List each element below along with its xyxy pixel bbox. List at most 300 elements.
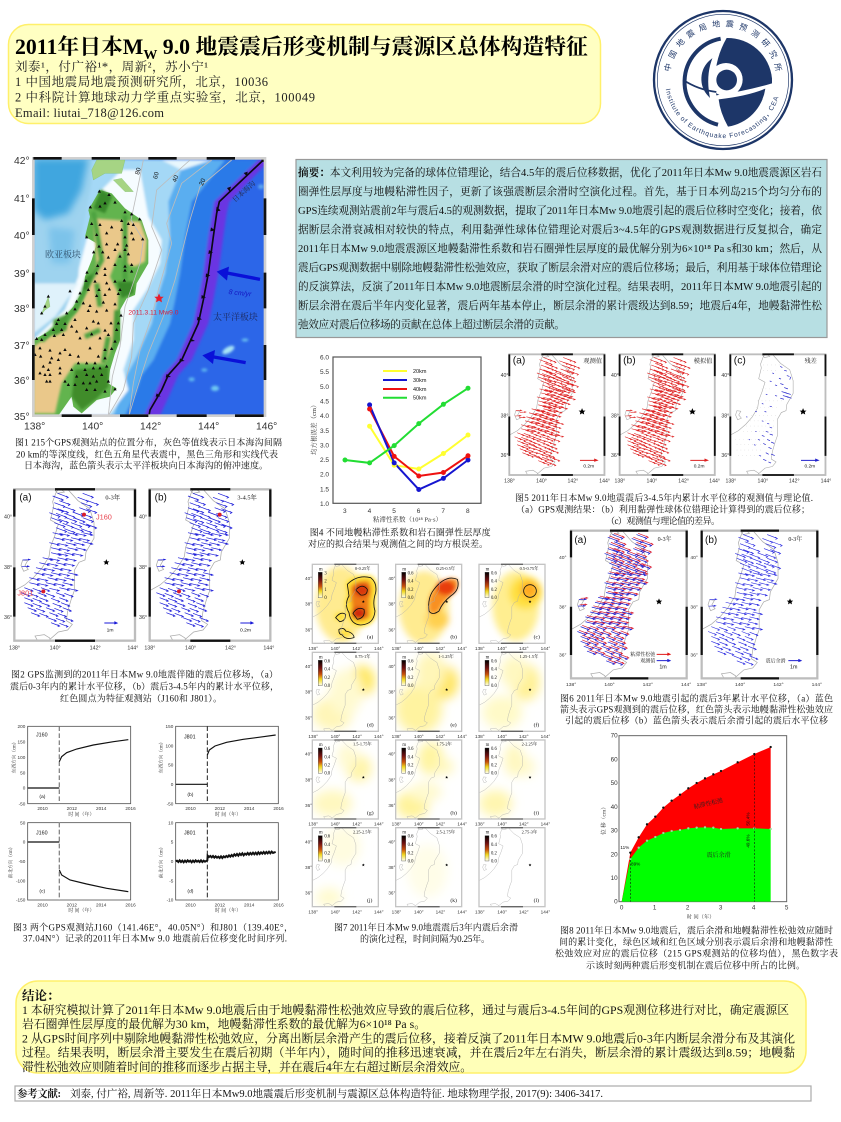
panel h [396,739,462,819]
authors and affiliations: 1 中国地震局地震预测研究所，北京，10036 [15,74,268,89]
axis labels: 40° [611,373,619,379]
plot b: 150 [166,724,174,729]
plate motion arrows [202,267,260,364]
axis labels: 38° [388,865,396,870]
axes: 5 [785,904,789,911]
axis labels: 38° [305,690,312,695]
logo chinese name: 中 [662,62,675,72]
heading: 9.0 地震震后形变机制与震源区总体构造特征 [157,35,588,59]
axis labels: 138° [308,909,318,914]
axis labels: 138° [475,646,485,651]
plot d: 2010 [185,902,196,907]
plot d: 2016 [273,902,284,907]
axes: 1 [653,904,657,911]
axis labels: 142° [436,646,445,651]
axis labels: 138° [725,478,736,484]
plot a: 0 [23,786,26,791]
contour labels: 60 [152,171,161,180]
figure 2 caption: 震后0-3年内的累计水平位移，（b）震后3-4.5年内的累计水平位移， [10,680,279,692]
figure 1 axis labels [14,156,277,432]
logo chinese name: 测 [749,27,762,41]
plot d: 2012 [215,902,225,907]
axes: 位 移（cm） [600,804,608,835]
axes: 2.5 [320,457,329,464]
plot b: 2014 [244,806,255,811]
axis labels: 38° [305,602,312,607]
axes: 1.5 [320,486,329,493]
logo [652,10,794,150]
panel a: 1m [107,627,114,633]
panel j: 0.6 [324,835,331,840]
axis labels: 138° [475,909,485,914]
area labels: 震后余滑 [707,851,731,859]
figure 4 caption: 对应的拟合结果与观测值之间的均方根误差。 [308,538,488,549]
panel f: 0.2 [491,676,497,681]
logo chinese name: 地 [712,18,721,30]
axes: 粘滞性系数（10¹⁸ Pa·s） [373,514,442,524]
plot b: 50 [168,763,174,768]
panel j: 0.2 [324,851,331,856]
figure 1 caption: 日本海沟，蓝色箭头表示太平洋板块向日本海沟的俯冲速度。 [24,460,268,472]
logo english name: Institute of Earthquake Forecasting，CEA [666,88,778,138]
figure 3 caption: 图3 两个GPS观测站J160（141.46E°，40.05N°）和J801（139.40E°， [13,922,293,934]
axis labels: 38° [721,414,729,420]
figure 1 axis labels: 140° [82,422,103,432]
panel l: 0.4 [491,843,497,848]
panel b: 3-4.5年 [237,493,258,502]
axis labels: 140° [604,682,615,688]
axis labels: 144° [821,478,831,484]
axis labels: 140° [497,734,507,739]
panel d: (d) [367,722,374,729]
plot d [158,820,284,914]
axis labels: 142° [643,682,653,688]
panel h: m [402,743,406,748]
panel a: 1m [659,665,667,671]
axis labels: 140° [331,909,340,914]
panel a: 粘滞性松弛 [630,651,655,658]
axis labels: 144° [374,909,384,914]
top curve points [629,746,772,854]
figure 8 caption [555,924,838,970]
panel k: 2.5-2.75年 [436,828,456,835]
panel d: 0.0 [324,684,331,689]
logo chinese name: 震 [725,18,734,30]
figure 1 axis labels: 142° [140,422,161,432]
figure 2 caption [10,668,279,704]
figure 6 caption [560,692,833,726]
axis labels: 144° [681,682,691,688]
abstract text: 震后GPS观测数据中剔除地幔黏滞性松弛效应，获取了断层余滑对应的震后位移场；最后，利用基于球体位错理论 [298,261,822,274]
axes: 5 [392,508,396,515]
axis labels: 138° [566,682,576,688]
axis labels: 40° [501,373,508,379]
plot d: 南北方向（cm） [158,845,165,878]
axes: 3.5 [320,428,329,435]
axis labels: 38° [4,565,12,571]
axis labels: 36° [559,652,567,658]
icon: epicentre star [154,293,164,302]
plot c: 50 [20,820,26,825]
panel b: m [402,567,406,572]
plot d: (d) [187,889,194,895]
axis labels: 142° [789,478,800,484]
logo chinese name: 地 [674,37,687,50]
figure 8 caption: 间的累计变化，绿色区域和红色区域分别表示震后余滑和地幔黏滞性 [559,936,833,948]
figure 1 axis labels: 138° [24,422,45,432]
axes: 4 [752,904,756,911]
axes: 2 [686,904,690,911]
axis labels: 140° [497,909,507,914]
panel k: 0.6 [408,835,414,840]
figure 1 axis labels: 38° [14,304,30,315]
figure 1 axis labels: 39° [14,269,30,280]
conclusions text [22,1003,795,1074]
panel k: m [402,831,406,836]
axis labels: 140° [647,478,657,484]
axis labels: 142° [225,645,236,651]
panel h: 0.0 [408,772,414,777]
panel b [702,529,817,679]
references box [15,1086,811,1101]
plot c: 2012 [67,902,77,907]
axis labels: 40° [139,514,147,520]
panel h: 1.75-2年 [436,741,453,748]
panel i [479,739,545,819]
area labels: 粘滞性松弛 [693,796,724,811]
panel a: 0-3年 [658,535,672,543]
panel f [479,651,545,731]
figure 1 axis labels: 144° [198,422,219,432]
panel b: (b) [155,493,167,504]
panel j: 0.0 [324,859,331,864]
axis labels: 142° [773,682,784,688]
panel a: (a) [574,535,587,546]
axes: 时 间（年） [687,913,715,921]
axis labels: 142° [352,646,362,651]
figure 8 caption: 示该时刻两种震后形变机制在震后位移中所占的比例。 [586,960,805,970]
figure 3 caption [13,922,293,944]
axis labels: 144° [374,822,384,827]
plot b: (b) [187,792,194,798]
figure 3: time series [7,724,284,914]
sea and bathymetry [33,158,270,416]
plot c: -150 [16,898,26,903]
plot c: 2016 [125,902,136,907]
axis labels: 142° [568,478,578,484]
axis labels: 142° [90,645,101,651]
axis labels: 142° [436,909,445,914]
axis labels: 138° [144,645,155,651]
axes: 3.0 [320,442,329,449]
axis labels: 36° [388,891,396,896]
figure 5 caption: 图5 2011年日本Mw 9.0地震震后3-4.5年内累计水平位移的观测值与理论值. [515,492,813,503]
axis labels: 38° [305,777,312,782]
axis labels: 40° [721,373,729,379]
figure 5 caption: （a）GPS观测结果：（b）利用黏弹性球体位错理论计算得到的震后位移； [516,504,810,514]
panel a: 0-0.25年 [355,565,371,572]
panel b: 0.2 [408,588,414,593]
axes: 7 [441,508,445,515]
axes: 0 [614,899,618,906]
axis labels: 140° [735,682,745,688]
figure 6 caption: 箭头表示GPS观测到的震后位移，红色箭头表示地幔黏滞性松弛效应 [560,704,833,716]
plot d: 5 [171,840,174,845]
panel a: J160 [96,512,112,521]
axis labels: 36° [305,627,312,632]
axis labels: 138° [308,646,318,651]
figure 7 caption [334,922,518,945]
panel b: (b) [705,535,717,546]
panel f: 0.0 [491,684,497,689]
figure 7 caption: 的演化过程，时间间隔为0.25年。 [360,933,490,945]
axis labels: 36° [501,453,508,459]
panel j: 2.25-2.5年 [353,828,372,835]
panel c: 0.6 [491,571,497,576]
axis labels: 138° [614,478,625,484]
abstract panel [296,160,827,338]
axes: 5.5 [320,369,329,376]
panel i: 0.2 [491,764,497,769]
figure 1 axis labels: 41° [14,194,30,205]
logo chinese name: 国 [666,48,680,61]
axis labels: 142° [352,822,362,827]
axis labels: 144° [541,822,550,827]
panel a: (a) [367,634,373,641]
panel g [312,739,378,819]
axis labels: 36° [305,715,312,720]
panel l: 2.75-3年 [522,828,538,835]
panel g: m [319,743,323,748]
legend: 30km [413,378,427,384]
panel l: m [486,831,490,836]
panel e [396,651,462,734]
axis labels: 40° [559,555,567,561]
abstract text: 弛效应对震后位移场的贡献在总体上超过断层余滑的贡献。 [298,318,565,331]
axis labels: 144° [374,646,384,651]
figure 1 caption: 图1 215个GPS观测站点的位置分布，灰色等值线表示日本海沟间隔 [15,436,282,448]
panel d: 0.4 [324,668,331,673]
panel e: 0.6 [408,659,414,664]
panel g: 1.5-1.75年 [353,741,372,748]
axis labels: 40° [388,664,396,669]
depth contours [108,160,232,416]
panel i: 2-2.25年 [522,741,538,748]
panel d: m [319,655,323,660]
panel j: 0.4 [324,843,331,848]
series: 50km [345,388,468,463]
conclusions panel [16,981,806,1074]
authors and affiliations: 2 中科院计算地球动力学重点实验室，北京，100049 [15,90,315,104]
plot b: 0 [171,782,174,787]
axis labels: 38° [501,414,508,420]
axis labels: 142° [436,822,445,827]
figure 2: postseismic displacement maps [4,487,274,651]
axis labels: 38° [690,604,698,610]
area labels: 50.4% [745,812,750,826]
panel c: 残差 [804,357,817,365]
axis labels: 138° [475,734,485,739]
axes: 6.0 [320,354,329,362]
panel e: 0.0 [408,684,414,689]
references box: 刘泰, 付广裕, 周新等. 2011年日本Mw9.0地震震后形变机制与震源区总体构造特征. 地球物理学报, 2017(9): 3406-3417. [70,1087,603,1100]
plot b: 100 [166,743,174,748]
axis labels: 36° [721,453,729,459]
figure 1: station map [33,158,270,416]
panel a: 观测值 [583,357,602,365]
plot d: -10 [167,898,174,903]
panel a: 2 [324,580,327,585]
panel b: (b) [623,356,636,367]
title panel [8,24,600,124]
panel i: 0.4 [491,755,497,760]
panel l [479,827,545,907]
axis labels: 140° [50,645,61,651]
panel g: 0.4 [324,755,331,760]
area labels: 49.6% [745,834,750,848]
abstract text: GPS连续观测站震前2年与震后4.5的观测数据，提取了2011年日本Mw 9.0地震引起的震后位移时空变化；接着，依 [298,204,822,217]
axis labels: 144° [263,645,274,651]
area labels [620,796,750,867]
panel e: m [402,655,406,660]
abstract text: 的反演算法，反演了2011年日本Mw 9.0地震断层余滑的时空演化过程。结果表明，2011年日本MW 9.0地震引起的 [298,280,822,293]
panel l: 0.0 [491,859,497,864]
panel i: m [486,743,490,748]
plot a: 200 [18,724,26,729]
logo chinese name: 局 [697,21,709,34]
plot c [7,820,136,914]
legend: 20km [413,369,427,375]
panel a: 0.2m [583,464,594,470]
panel f: 1.25-1.5年 [520,653,539,660]
axes: 70 [611,733,618,740]
panel b [150,487,270,641]
axis labels: 144° [457,734,467,739]
panel j: m [319,831,323,836]
axis labels: 144° [127,645,138,651]
abstract text: 2011年日本Mw 9.0地震震源区地幔黏滞性系数和岩石圈弹性层厚度的最优解分别为6×10¹⁸ Pa s和30 km；然后，从 [298,242,822,255]
figure 1 caption: 20 km的等深度线，红色五角星代表震中，黑色三角形和实线代表 [16,448,278,460]
axes: 3 [343,508,347,515]
figure 2 caption: 图2 GPS监测到的2011年日本Mw 9.0地震伴随的震后位移场，（a） [11,668,278,680]
figure 1 axis labels: 40° [14,231,30,242]
panel f: m [486,655,490,660]
axis labels: 140° [185,645,196,651]
figure 1 axis labels: 42° [14,156,30,167]
plot d: -5 [169,878,174,883]
axes: 20 [611,851,618,858]
panel b: 0.2m [240,627,251,633]
panel a: m [319,567,323,572]
axis labels: 40° [388,576,396,581]
axis labels: 40° [305,576,312,581]
axes [600,733,789,921]
axis labels: 140° [331,734,340,739]
plot a: J160 [36,733,48,739]
panel a: 1 [324,588,327,593]
figure 6: viscoelastic and afterslip maps [559,529,822,688]
logo chinese name: 究 [766,48,780,61]
map frame [33,158,265,416]
axis labels: 144° [812,682,822,688]
red area: viscoelastic relaxation [622,747,771,902]
panel c: 0.2m [804,464,815,470]
panel b: 震后余滑 [766,657,786,664]
plot c: J160 [36,831,48,837]
figure 8 caption: 松弛效应对应的震后位移（215 GPS观测站的位移均值），黑色数字表 [555,948,838,960]
plot c: 时 间（年） [68,907,95,914]
legend: 40km [413,387,427,393]
axis labels: 140° [536,478,547,484]
axis labels: 142° [519,822,529,827]
plot d: 10 [168,820,174,825]
axis labels: 38° [388,602,396,607]
axis labels: 40° [690,555,698,561]
plot a: 东西方向（cm） [10,740,17,773]
lower curve points [629,826,772,860]
panel c [479,563,545,643]
panel b: (b) [450,634,457,641]
plot b: 2012 [215,806,225,811]
axis labels [4,514,274,651]
axis labels: 140° [497,646,507,651]
panel b: 0-3年 [788,535,802,543]
axes: 均方根误差（cm） [309,402,318,455]
abstract text: 据断层余滑衰减相对较快的特点，利用黏弹性球体位错理论对震后3~4.5年的GPS观测数据进行反复拟合，确定 [298,223,822,236]
axes: 40 [611,804,618,811]
figure 5 caption: （c）观测值与理论值的差异。 [606,515,720,526]
plot c: -50 [19,859,26,864]
axis labels: 138° [504,478,515,484]
panel b: 0.2m [694,464,705,470]
axis labels: 144° [541,646,550,651]
axes: 2.0 [320,472,329,479]
green area: afterslip [622,827,771,902]
axis labels: 138° [392,646,401,651]
axis labels [501,373,831,484]
axis labels: 138° [697,682,707,688]
panel b: 模拟值 [694,357,712,365]
panel h: 0.6 [408,747,414,752]
axis labels: 36° [388,715,396,720]
plate and epicentre labels: 日本海沟 [230,179,257,204]
plot c: (c) [39,889,45,895]
panel a: 0 [324,596,327,601]
panel c: 0.4 [491,580,497,585]
panel a [509,353,604,475]
plot b [158,724,284,818]
conclusions text: 岩石圈弹性层厚度的最优解为30 km，地幔黏滞性系数的最优解为6×10¹⁸ Pa s。 [22,1017,426,1031]
plot b: 时 间（年） [215,811,241,818]
figure 2 caption: 红色圆点为特征观测站（J160和 J801）。 [60,692,222,704]
axis labels: 38° [388,690,396,695]
panel a: 3 [324,571,327,576]
plot a: 2016 [125,806,136,811]
figure 1 caption [15,436,282,472]
plate and epicentre labels: 欧亚板块 [45,248,81,259]
axis labels: 138° [9,645,20,651]
panel d: 0.75-1年 [355,653,371,660]
logo chinese name: 震 [684,27,697,41]
panel b [396,563,462,644]
contour labels [134,166,208,187]
plot b: J801 [184,735,196,741]
axes: 4.5 [320,398,329,406]
panel a: 观测值 [640,657,655,664]
figure 7 caption: 图7 2011年日本Mw 9.0地震震后3年内震后余滑 [334,922,518,932]
axes: 4.0 [320,413,329,420]
plot a: 50 [20,770,26,775]
